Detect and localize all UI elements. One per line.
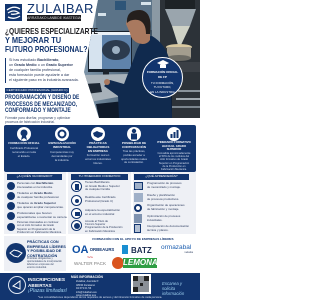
course title: CONFORMADO Y MONTAJE [5, 107, 71, 114]
feature 4 text: oportunidades reales [121, 157, 147, 161]
callout heading: Y POSIBILIDAD DE [27, 249, 61, 253]
audience item 5: Personas interesadas en continuar [17, 221, 59, 224]
feature 2 heading: INDUSTRIAL [53, 145, 71, 149]
logo: lemona: LEMONA [123, 258, 158, 267]
enrollment heading: INSCRIPCIONES [28, 277, 65, 282]
scan prompt [162, 281, 192, 293]
intro text: de cualquier familia profesional, [9, 68, 61, 72]
audience item 5: Producción en Fabricación Mecánica. [17, 231, 62, 234]
audience item 5: Superior en Programación de la [17, 228, 55, 231]
learning item 4 [134, 214, 180, 223]
audience item 2: de cualquier familia profesional. [17, 195, 59, 199]
icon: worker [127, 127, 141, 141]
learning item 5 [134, 224, 189, 233]
feature 2 text [50, 150, 74, 162]
learning item 5: Interpretación de documentación [147, 224, 189, 228]
qr code [131, 274, 151, 294]
feature 4 heading: CONTRATACIÓN [122, 145, 146, 149]
feature 5 text: ciclo formativo de Grado [160, 158, 188, 161]
feature 5 text: Superior en Programación [159, 162, 189, 165]
learning item 2: de procesos productivos. [147, 197, 179, 201]
feature 5 text: Fabricación Mecánica. [161, 168, 187, 171]
itinerary step 3: en el entorno industrial [85, 212, 114, 216]
feature 2 text: Competencias muy [50, 150, 74, 154]
course subtitle: procesos de fabricación industrial. [5, 120, 55, 124]
itinerary step 2: Realiza este Certificado [85, 195, 116, 199]
badge heading: DE FP [158, 74, 167, 78]
feature 2 heading [48, 141, 76, 149]
feature 1 [8, 127, 40, 158]
feature 5 heading [157, 140, 191, 151]
feature 1 text: Certificado Profesional [10, 146, 38, 150]
heading: tu itinerario formativo: TU ITINERARIO FORMATIVO [79, 174, 120, 178]
itinerary step 2: Profesional (Grado C) [85, 198, 113, 202]
itinerary step 1: un Grado Medio o Superior [85, 184, 120, 188]
course subtitle [5, 116, 70, 124]
itinerary step 1 [71, 180, 120, 192]
logo: batz [122, 245, 151, 255]
badge text [150, 81, 175, 94]
logo: ormazabal: velatia [184, 250, 193, 254]
feature 2 heading: ESPECIALIZACIÓN [48, 141, 76, 145]
logo: ormazabal [161, 244, 193, 255]
itinerary step 4: en Fabricación Mecánica [85, 230, 115, 233]
feature 4 heading: POSIBILIDAD DE [122, 141, 146, 145]
contact list [76, 280, 99, 298]
feature 5 text: de la Producción en [163, 165, 185, 168]
badge: formacion oficial [142, 57, 183, 98]
audience list [7, 181, 68, 234]
contact list: www.zulaibar.eus [76, 294, 96, 297]
heading: a quien va dirigido: ¿A QUIÉN VA DIRIGIDO? [17, 174, 52, 178]
logo: batz: BATZ [131, 246, 152, 255]
learning item 5: técnica y planos. [147, 228, 169, 232]
feature 1 heading: FORMACIÓN OFICIAL [8, 141, 40, 145]
audience item 4: Profesionales que buscan [17, 211, 52, 215]
feature 5 text [157, 152, 191, 171]
feature 3 text: entornos industriales [85, 157, 111, 161]
icon: handshake circle [6, 243, 26, 263]
contact list: Zulaibar, Avenida P. [76, 280, 99, 283]
audience item 3: que quieran ampliar competencias. [17, 205, 64, 209]
callout text: oportunidades de incorporación [27, 260, 62, 263]
logo tagline: ARRATIAKO LANBIDE IKASTEGIA [27, 16, 81, 20]
itinerary step 3 [71, 208, 120, 219]
audience item 2: Titulados en Grado Medio [17, 191, 52, 195]
panel: sponsors [72, 237, 193, 269]
contact heading: MÁS INFORMACIÓN [71, 275, 103, 279]
feature 2 text: demandadas por [52, 154, 72, 158]
contact list: 94 673 01 56 [76, 287, 91, 290]
sponsors heading: FORMACIÓN CON EL APOYO DE EMPRESAS LÍDERES [92, 237, 174, 241]
heading: que aprenderas [134, 174, 189, 180]
itinerary step 4: Técnico Superior [85, 223, 105, 226]
feature 5 heading: ITINERARIO FORMATIVO [157, 140, 191, 144]
feature 3 text: líderes. [93, 161, 103, 165]
itinerary step 1: de cualquier familia [85, 187, 110, 191]
panel: internships callout [4, 236, 66, 271]
enrollment heading: ABIERTAS [28, 282, 52, 288]
panel: features [4, 125, 196, 172]
panel: what you learn [133, 172, 196, 234]
feature 1 text [10, 146, 38, 158]
logo icon [5, 4, 22, 21]
feature 4 text: de contratación. [124, 160, 144, 164]
icon: gear [55, 127, 69, 141]
audience item 2 [7, 191, 59, 200]
course subtitle: Fórmate para diseñar, programar y optimizar [5, 116, 70, 120]
scan prompt: solicita [162, 286, 175, 291]
logo wordmark: ZULAIBAR [27, 0, 94, 16]
itinerary step 4: Accede al Título de [85, 220, 108, 223]
feature 3 text [85, 153, 111, 165]
learning item 3: Organización de operaciones [147, 203, 185, 207]
course title: PROCESOS DE MECANIZADO, [5, 101, 77, 108]
panel: footer: información [162, 291, 184, 296]
badge text: EN LA INDUSTRIA [150, 90, 175, 94]
contact list: 48330 Zaratamo [76, 284, 95, 286]
feature 4 heading [122, 141, 146, 149]
feature 4 text: podrás acceder a [123, 153, 145, 157]
feature 4 [121, 127, 147, 164]
audience item 1 [7, 181, 54, 190]
logo: walter pack [72, 256, 108, 270]
callout text: laboral en empresas del [27, 263, 54, 266]
feature 3 heading: EN EMPRESA [88, 149, 108, 153]
feature 5 heading: SUPERIOR [167, 147, 181, 151]
feature 5 text: el 50% de los módulos del [159, 155, 189, 158]
contact information [71, 275, 121, 297]
course title [5, 93, 80, 114]
itinerary step 1: Tienes Bachillerato [85, 180, 109, 184]
icon: medal [17, 127, 31, 141]
heading: a quien va dirigido [7, 174, 62, 180]
feature 3 heading: OBLIGATORIAS [87, 145, 109, 149]
learning item 1: Programación de procesos [147, 181, 182, 185]
icon: graduation cap [157, 60, 169, 68]
limited seats: ¡Plazas limitadas! [28, 288, 67, 294]
photo: engineer at CNC machine [84, 0, 200, 118]
audience item 4: especializarse o reorientar su carrera. [17, 215, 67, 219]
feature 3 heading [86, 141, 110, 153]
panel: internships callout: CONTRATACIÓN [27, 254, 57, 258]
learning item 2: Diseño y planificación [147, 193, 175, 197]
feature 1 text: reconocido en toda [12, 150, 36, 154]
itinerary step 3: Adquiere la especialización [85, 208, 120, 212]
footnote: *Las convalidaciones dependerán de los requisitos de acceso y del itinerario formativo de cada persona. [38, 296, 162, 298]
audience item 3: Titulados de Grado Superior [17, 201, 56, 205]
logo: ormazabal: ormazabal [161, 244, 191, 251]
badge heading [147, 70, 178, 78]
title: Y MEJORAR TU [5, 36, 61, 45]
badge heading: FORMACIÓN OFICIAL [147, 70, 178, 74]
itinerary step 2 [71, 195, 116, 206]
course title: PROGRAMACIÓN Y DISEÑO DE [5, 94, 79, 101]
icon: handshake [91, 127, 105, 141]
intro text: un Grado Medio o un Grado Superior [9, 63, 73, 67]
feature 5 heading: HACIA EL GRADO [162, 144, 186, 148]
feature 4 text [121, 149, 147, 164]
audience item 5: con el ciclo formativo de Grado [17, 224, 54, 227]
callout text [27, 257, 62, 269]
learning item 2 [134, 193, 179, 202]
callout heading [27, 240, 66, 258]
feature 2 text: la industria. [55, 158, 69, 162]
badge text: TU FUTURO, [154, 85, 171, 89]
icon: bar chart [167, 127, 181, 141]
scan prompt: Escanea y [162, 281, 182, 286]
learning item 3: de fabricación y montaje. [147, 207, 179, 211]
intro text: Si has estudiado Bachillerato, [9, 58, 59, 62]
feature 4 text: Tras las prácticas, [123, 149, 145, 153]
audience item 1: Personas con Bachillerato [17, 181, 53, 185]
feature 1 text: el Estado. [18, 154, 30, 158]
logo: walter pack: ~~ [87, 255, 93, 261]
feature 5 text: Convalida aproximadamente [157, 152, 191, 155]
logo tagline [27, 15, 81, 21]
enrollment heading [28, 277, 66, 288]
feature 5 [157, 127, 191, 171]
audience item 3 [7, 201, 64, 210]
icon: megaphone circle [8, 276, 26, 294]
feature 3 [85, 127, 111, 165]
callout text: entorno industrial. [27, 266, 47, 269]
itinerary step 4: Programación de la Producción [85, 226, 122, 229]
title [5, 27, 98, 54]
callout heading: EMPRESAS LÍDERES [27, 245, 66, 249]
intro text: el siguiente paso en la industria avanzada. [9, 78, 79, 82]
panel: itinerary [68, 172, 131, 234]
audience item 1: interesadas en la industria. [17, 185, 53, 189]
heading: tu itinerario formativo [71, 174, 128, 180]
callout text: Prácticas obligatorias y [27, 257, 53, 260]
contact list: info@zulaibar.eus [76, 290, 97, 294]
heading: que aprenderas: ¿QUÉ APRENDERÁS? [145, 174, 178, 178]
logo: lemona [112, 256, 169, 270]
callout heading: PRÁCTICAS CON [27, 240, 59, 244]
learning item 4: Optimización de procesos [147, 214, 180, 218]
itinerary step 4 [71, 220, 122, 233]
badge text: TU FORMACIÓN, [151, 81, 174, 85]
logo: oa: OA ORBEAURS [72, 244, 114, 256]
certificate bar: CERTIFICADO PROFESIONAL (GRADO C) [6, 88, 68, 92]
intro accent line [5, 58, 6, 83]
learning item 3 [134, 203, 185, 212]
panel: footer [0, 273, 200, 300]
title: FUTURO PROFESIONAL? [5, 45, 87, 54]
learning item 4: industriales. [147, 218, 162, 222]
audience item 4 [7, 211, 68, 220]
panel: target audience [4, 172, 66, 234]
feature 3 heading: PRÁCTICAS [89, 141, 107, 145]
intro text: esta formación puede ayudarte a dar [9, 73, 69, 77]
intro text [9, 58, 79, 82]
title: ¿QUIERES ESPECIALIZARTE [5, 27, 98, 36]
learning item 1 [134, 181, 182, 190]
logo: walter pack: WALTER PACK [74, 261, 106, 266]
learning item 1: de mecanizado y montaje. [147, 185, 181, 189]
feature 2 [48, 127, 76, 162]
audience item 5 [7, 221, 62, 234]
feature 3 text: Formación real en [87, 153, 109, 157]
